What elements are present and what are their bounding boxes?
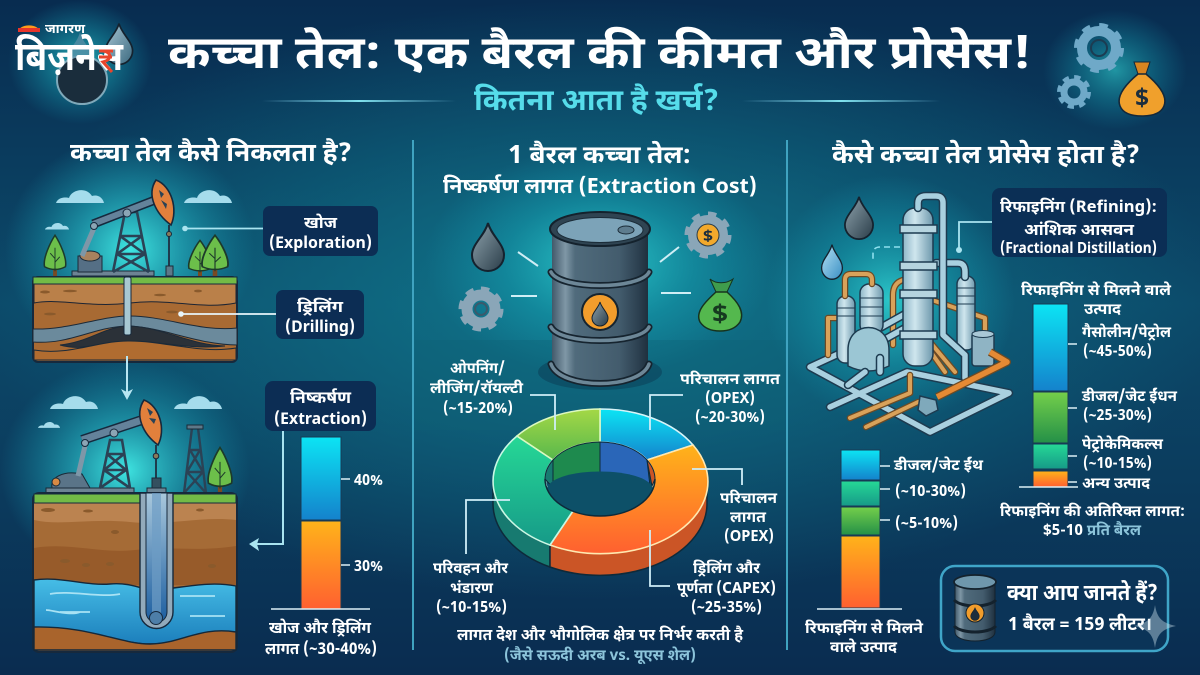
text: refining extra cost: रिफाइनिंग की अतिरिक्त लागत: xyxy=(1000,502,1185,523)
chart: refinery products bar: उत्पाद xyxy=(1084,302,1122,321)
panel: extraction xyxy=(33,138,383,661)
callout: did you know: क्या आप जानते हैं? xyxy=(1007,580,1158,609)
label: extraction with arrow xyxy=(249,381,376,551)
heading: one barrel cost: 1 बैरल कच्चा तेल: xyxy=(508,140,691,174)
illustration: upper ground cross-section xyxy=(33,277,237,362)
chart: second products bar: रिफाइनिंग से मिलने xyxy=(805,619,924,640)
label: drilling: (Drilling) xyxy=(285,318,355,339)
illustration: refinery xyxy=(810,196,1009,432)
label: exploration xyxy=(182,206,378,256)
subtitle: कितना आता है खर्च? xyxy=(474,82,719,123)
label: transport: (~10-15%) xyxy=(436,599,507,619)
label: refining xyxy=(956,188,1167,260)
icon: money bag: $ xyxy=(712,300,728,332)
label: leasing: (~15-20%) xyxy=(443,400,513,420)
footnote: लागत देश और भौगोलिक क्षेत्र पर निर्भर करती है xyxy=(457,625,744,647)
chart: extraction stacked bar: 40% xyxy=(354,473,383,492)
chart: refinery products bar: (~45-50%) xyxy=(1083,343,1152,363)
chart: extraction stacked bar xyxy=(265,437,383,661)
chart: refinery products bar: (~25-30%) xyxy=(1083,407,1152,427)
label: capex xyxy=(677,559,776,619)
icon: gear xyxy=(463,291,499,327)
heading: how crude is processed: कैसे कच्चा तेल प्रोसेस होता है? xyxy=(832,140,1140,174)
footnote: (जैसे सऊदी अरब vs. यूएस शेल) xyxy=(504,646,696,667)
icon: gears and money bag xyxy=(1060,27,1165,116)
label: opex share: (~20-30%) xyxy=(695,409,765,429)
label: opex share: परिचालन लागत xyxy=(680,371,781,391)
logo: Jagran Business: बिज़नेस xyxy=(15,34,124,87)
label: opex share: (OPEX) xyxy=(705,390,755,410)
illustration: surface drilling rig xyxy=(44,180,232,277)
icon: small barrel xyxy=(954,575,996,641)
chart: second products bar: (~10-30%) xyxy=(895,483,966,503)
label: opex: लागत xyxy=(730,510,767,529)
chart: refinery products bar: (~10-15%) xyxy=(1083,455,1152,475)
title: कच्चा तेल: एक बैरल की कीमत और प्रोसेस! xyxy=(168,25,1032,87)
illustration: lower ground and well xyxy=(33,493,237,652)
label: opex xyxy=(720,490,778,548)
chart: refinery products bar: गैसोलीन/पेट्रोल xyxy=(1082,323,1172,344)
label: opex: (OPEX) xyxy=(724,528,774,548)
label: leasing: लीजिंग/रॉयल्टी xyxy=(430,379,524,400)
label: capex: (~25-35%) xyxy=(691,599,762,619)
label: refining: आंशिक आसवन xyxy=(1024,221,1135,242)
icon: dollar gear xyxy=(689,216,727,254)
label: exploration: (Exploration) xyxy=(269,234,372,255)
text: refining extra cost: $5-10 प्रति बैरल xyxy=(1043,521,1142,542)
dividers xyxy=(412,140,788,650)
label: refining: रिफाइनिंग (Refining): xyxy=(1000,197,1157,219)
label: transport: परिवहन और xyxy=(433,560,508,580)
chart: second products bar: डीजल/जेट ईंथ xyxy=(893,456,983,477)
connector strokes xyxy=(511,247,691,296)
label: refining: (Fractional Distillation) xyxy=(1000,240,1157,260)
label: exploration: खोज xyxy=(304,214,337,235)
panel: refining xyxy=(805,140,1185,659)
callout: did you know: 1 बैरल = 159 लीटर। xyxy=(1008,613,1152,638)
chart: extraction stacked bar: खोज और ड्रिलिंग xyxy=(269,618,372,640)
text: refining extra cost xyxy=(1000,502,1185,542)
chart: second products bar: वाले उत्पाद xyxy=(830,638,898,659)
label: transport: भंडारण xyxy=(450,580,494,600)
chart: extraction stacked bar: लागत (~30-40%) xyxy=(265,640,377,661)
panel: extraction cost xyxy=(430,140,781,667)
label: drilling xyxy=(178,290,364,339)
logo: Jagran Business: जागरण xyxy=(45,22,86,39)
icon: oil drop xyxy=(472,223,504,271)
footnote xyxy=(457,625,744,667)
chart: second products bar xyxy=(805,450,983,659)
heading: one barrel cost xyxy=(443,140,757,202)
label: extraction with arrow: निष्कर्षण xyxy=(290,388,352,410)
chart: second products bar: (~5-10%) xyxy=(895,515,958,535)
callout: did you know xyxy=(941,566,1176,651)
icon: barrel xyxy=(538,212,662,390)
label: opex: परिचालन xyxy=(720,490,778,510)
heading: how crude is extracted: कच्चा तेल कैसे निकलता है? xyxy=(70,138,352,172)
label: opex share xyxy=(680,371,781,429)
icon: money bag xyxy=(699,279,742,332)
label: leasing xyxy=(430,359,524,420)
icon: dollar gear: $ xyxy=(703,229,713,248)
chart: refinery products bar xyxy=(1019,281,1178,495)
heading: one barrel cost: निष्कर्षण लागत (Extraction Cost) xyxy=(443,174,757,202)
label: capex: पूर्णता (CAPEX) xyxy=(677,579,776,600)
chart: refinery products bar: पेट्रोकेमिकल्स xyxy=(1082,435,1164,456)
chart: refinery products bar: डीजल/जेट ईंधन xyxy=(1081,387,1178,408)
label: capex: ड्रिलिंग और xyxy=(693,559,760,580)
label: leasing: ओपनिंग/ xyxy=(450,359,505,380)
chart: refinery products bar: अन्य उत्पाद xyxy=(1082,476,1151,495)
icon: gears and money bag: $ xyxy=(1135,84,1149,116)
leaders for donut xyxy=(466,395,742,586)
label: extraction with arrow: (Extraction) xyxy=(274,409,367,431)
logo: Jagran Business xyxy=(15,22,133,104)
label: drilling: ड्रिलिंग xyxy=(297,297,344,319)
chart: extraction stacked bar: 30% xyxy=(354,559,383,578)
label: transport xyxy=(433,560,508,619)
chart: cost donut xyxy=(493,409,708,575)
chart: refinery products bar: रिफाइनिंग से मिलने वाले xyxy=(1021,281,1172,302)
arrow: down to extraction xyxy=(121,356,133,400)
illustration: extraction rig xyxy=(38,396,232,494)
